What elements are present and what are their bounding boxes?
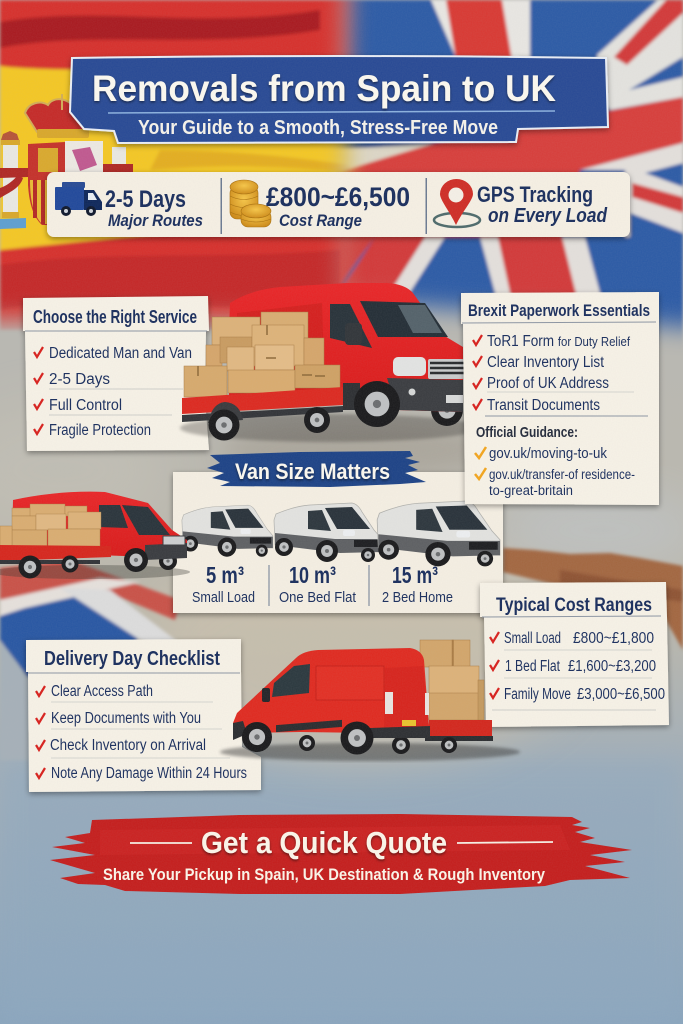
list items: Transit Documents	[487, 397, 600, 414]
stat: cost range: Cost Range	[279, 211, 362, 230]
illustration: red van with trailer left	[0, 492, 190, 579]
van size: small load	[192, 562, 255, 606]
stat: 2-5 days	[105, 186, 203, 230]
list items: Note Any Damage Within 24 Hours	[51, 765, 247, 782]
panel: choose the right service	[23, 296, 209, 451]
icon: small white van	[182, 505, 273, 557]
list items	[34, 345, 192, 439]
icon: large white van	[377, 501, 500, 566]
boxes on trailer	[184, 312, 340, 397]
stat: 2-5 days: Major Routes	[108, 211, 203, 230]
list items: Fragile Protection	[49, 422, 151, 439]
background: UK flag fragment left	[0, 560, 195, 760]
cta heading: Get a Quick Quote	[201, 825, 447, 860]
list items: ToR1 Form for Duty Relief	[487, 333, 630, 350]
list items: £1,600~£3,200	[568, 658, 656, 675]
background: Spanish flag	[0, 0, 400, 330]
heading: van size matters	[207, 451, 426, 487]
stat: cost range	[266, 182, 410, 230]
trailer	[182, 387, 343, 414]
list items: Dedicated Man and Van	[49, 345, 192, 362]
panel: typical cost ranges	[480, 582, 669, 727]
title: Removals from Spain to UK	[92, 68, 556, 109]
illustration: large red van with trailer	[180, 283, 480, 442]
van size: small load: 5 m³	[206, 562, 244, 588]
heading: Choose the Right Service	[33, 307, 197, 327]
official guidance: gov.uk/moving-to-uk	[489, 446, 608, 462]
van size: 2 bed home: 15 m³	[392, 562, 438, 588]
list items: Proof of UK Address	[487, 375, 609, 392]
official guidance: Official Guidance:	[476, 424, 578, 441]
list items: £3,000~£6,500	[577, 686, 665, 703]
official guidance: gov.uk/transfer-of residence-	[489, 467, 635, 482]
list items: Check Inventory on Arrival	[50, 737, 206, 754]
list items: Clear Inventory List	[487, 354, 605, 371]
list items: Full Control	[49, 397, 122, 414]
stat: 2-5 days: 2-5 Days	[105, 186, 186, 213]
van size: 2 bed home	[382, 562, 453, 606]
icon: gold coins	[230, 180, 271, 227]
icon: blue truck	[55, 182, 102, 216]
list items	[490, 630, 665, 703]
subtitle: Your Guide to a Smooth, Stress-Free Move	[138, 117, 498, 139]
stat: cost range: £800~£6,500	[266, 182, 410, 212]
illustration: red van rear view with trailer	[220, 640, 520, 761]
stat: GPS tracking: GPS Tracking	[477, 182, 593, 207]
van size: 2 bed home: 2 Bed Home	[382, 589, 453, 606]
list items: Keep Documents with You	[51, 710, 201, 727]
official guidance: to-great-britain	[489, 483, 573, 498]
stat: GPS tracking	[477, 182, 608, 227]
panel: delivery day checklist	[26, 639, 261, 792]
list items: Family Move	[504, 686, 571, 703]
official guidance	[475, 424, 635, 498]
list items: Small Load	[504, 630, 561, 647]
van size: one bed flat: 10 m³	[289, 562, 336, 588]
icon: GPS pin	[434, 179, 480, 227]
panel: brexit paperwork essentials	[461, 292, 659, 505]
stat: GPS tracking: on Every Load	[488, 205, 608, 227]
panel: van sizes	[173, 472, 503, 613]
icon: medium white van	[274, 503, 381, 562]
heading: Typical Cost Ranges	[496, 595, 652, 616]
cta subtext: Share Your Pickup in Spain, UK Destination & Rough Inventory	[103, 865, 545, 884]
stats bar	[47, 172, 630, 237]
list items: 2-5 Days	[49, 371, 110, 388]
list items: 1 Bed Flat	[505, 658, 561, 675]
icon: Spanish coat of arms	[0, 94, 133, 229]
list items	[473, 333, 630, 414]
van size: one bed flat	[279, 562, 357, 606]
heading: Delivery Day Checklist	[44, 648, 220, 670]
background: rocky hillside	[503, 548, 683, 650]
van size: small load: Small Load	[192, 589, 255, 606]
call to action	[50, 814, 632, 894]
title banner	[70, 56, 608, 143]
list items: £800~£1,800	[573, 630, 654, 647]
list items	[36, 683, 247, 782]
background: UK flag	[336, 0, 683, 344]
van size: one bed flat: One Bed Flat	[279, 589, 357, 606]
heading: van size matters: Van Size Matters	[235, 459, 390, 484]
list items: Clear Access Path	[51, 683, 153, 700]
